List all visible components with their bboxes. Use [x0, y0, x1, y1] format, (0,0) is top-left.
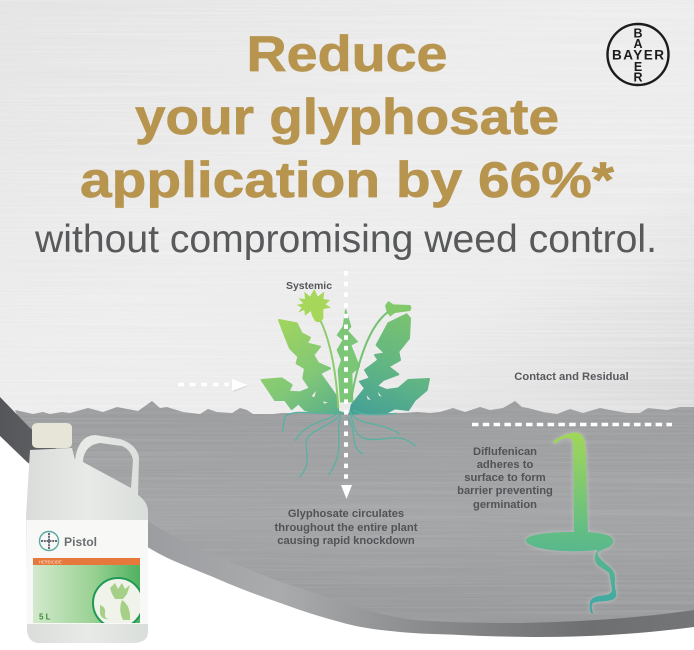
title: your glyphosate — [135, 89, 559, 145]
Bayer logo — [608, 24, 668, 85]
caption: diflufenican: Diflufenican — [473, 446, 537, 458]
bottle body — [26, 435, 148, 643]
subtitle: without compromising weed control. — [34, 218, 657, 261]
weed illustration roundel — [92, 577, 140, 623]
orange band with product type — [33, 558, 140, 565]
arrow: horizontal dotted — [178, 379, 248, 392]
Bayer logo: BAYER — [612, 48, 664, 62]
caption: diflufenican: germination — [473, 499, 537, 511]
icon: germinating sprout — [526, 433, 616, 614]
bottle label — [26, 520, 148, 624]
caption: glyphosate: throughout the entire plant — [275, 522, 418, 534]
caption: glyphosate: Glyphosate circulates — [288, 508, 404, 520]
small Bayer logo — [40, 532, 58, 550]
volume: 5 L — [39, 612, 51, 622]
title: Reduce — [246, 26, 448, 82]
soil cross-section — [0, 397, 694, 637]
Bayer logo: B — [633, 26, 643, 40]
right half of plant — [350, 301, 429, 414]
caption: diflufenican: barrier preventing — [457, 485, 553, 497]
caption: diflufenican — [457, 446, 553, 511]
label: Contact and Residual: Contact and Residual — [514, 371, 629, 383]
icon: dandelion plant — [262, 289, 429, 477]
product: Pistol bottle — [26, 423, 148, 643]
dark lower lip of soil — [0, 397, 694, 637]
bottle cap — [32, 423, 72, 448]
roots — [282, 410, 415, 477]
brushed metal background — [0, 0, 694, 425]
caption: diflufenican: surface to form — [464, 472, 546, 484]
caption: glyphosate — [275, 508, 418, 547]
title — [80, 26, 615, 208]
caption: diflufenican: adheres to — [477, 459, 533, 471]
arrow: systemic downward dotted — [341, 271, 352, 499]
Bayer logo: R — [633, 70, 643, 84]
orange band with product type: HERBICIDE — [39, 560, 62, 564]
title: application by 66%* — [80, 152, 615, 208]
Bayer logo: A — [633, 37, 643, 51]
left half of plant — [262, 289, 345, 414]
label: Systemic: Systemic — [286, 280, 332, 292]
dashed barrier line — [472, 423, 672, 426]
green panel — [33, 565, 140, 623]
caption: glyphosate: causing rapid knockdown — [277, 535, 415, 547]
centre leaf — [337, 310, 359, 402]
product name: Pistol — [64, 535, 97, 549]
Bayer logo: E — [634, 60, 642, 74]
